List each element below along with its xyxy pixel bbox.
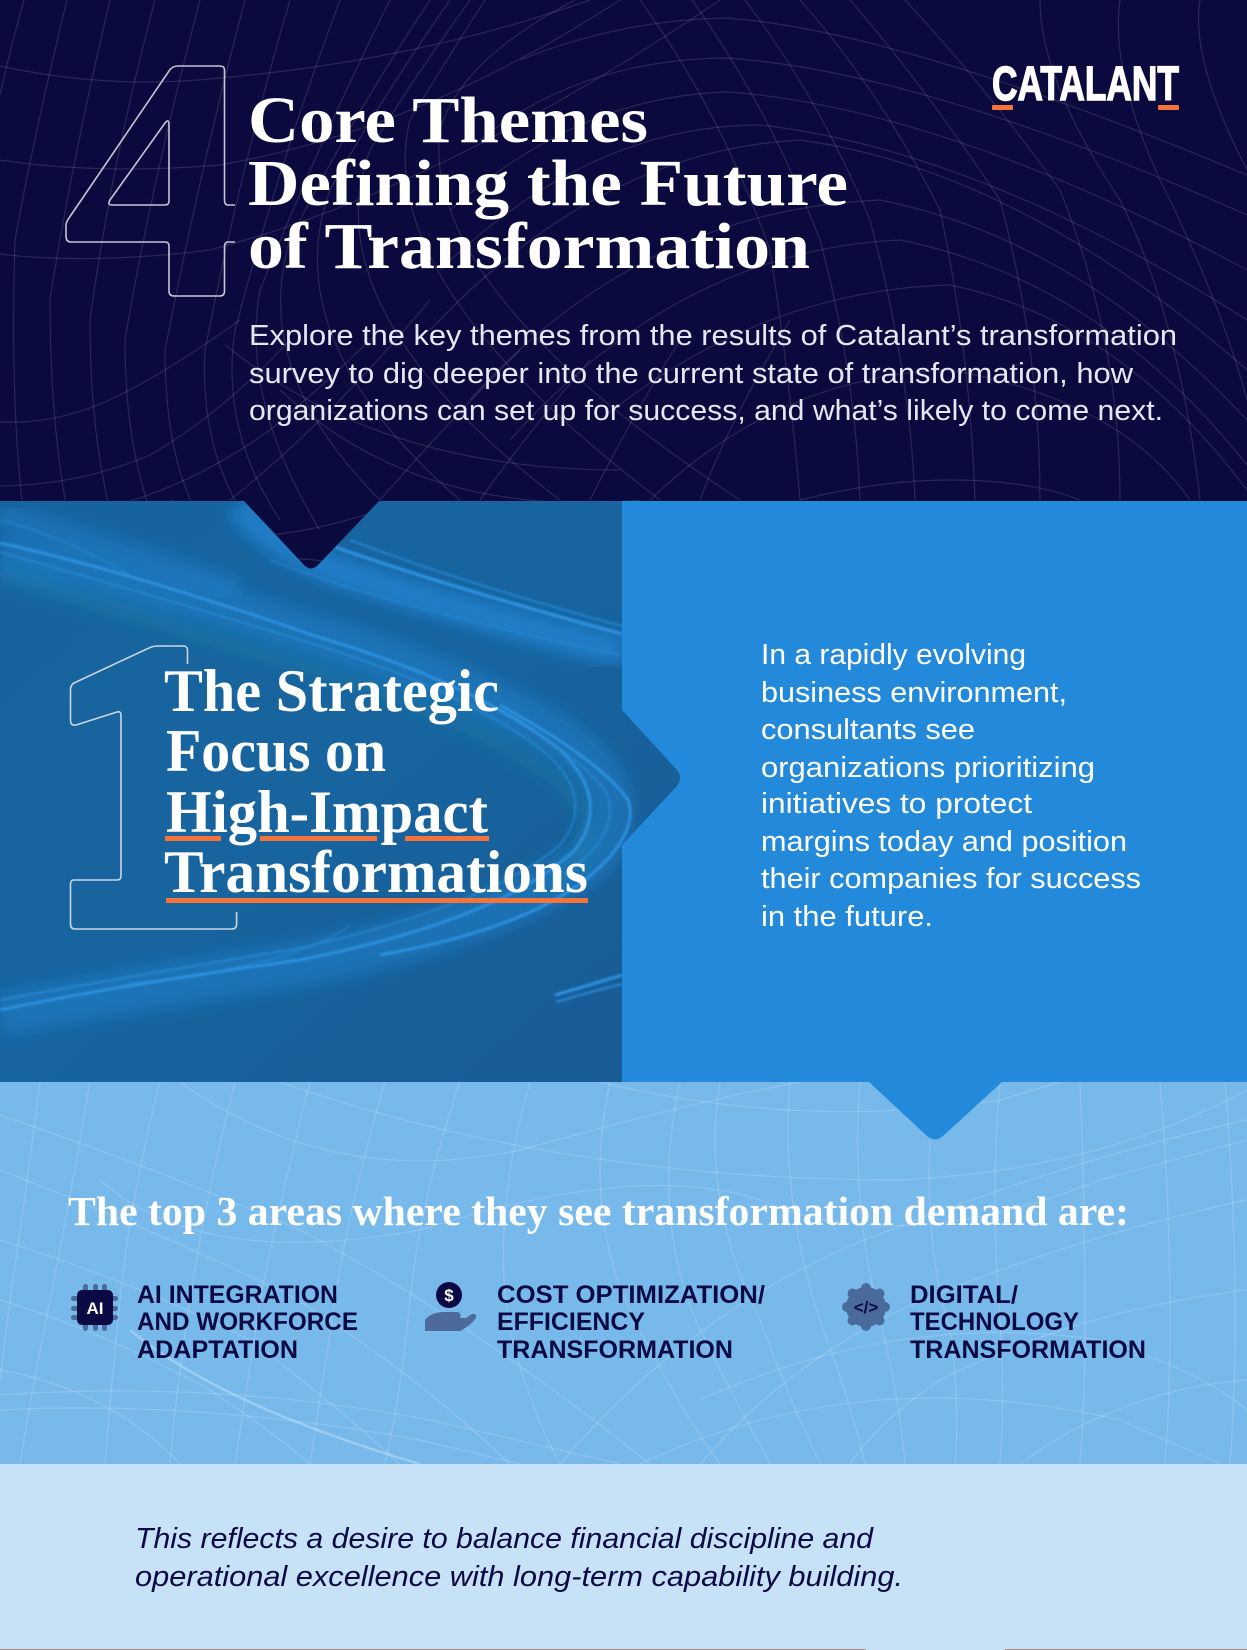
panel: right blue text panel [622, 501, 1247, 1082]
title [248, 84, 848, 283]
logo: Catalant: CATALANT [992, 58, 1179, 111]
text block: business environment: margins today and position [761, 826, 1127, 858]
panel: photo background with light streaks and right-pointing arrow [0, 501, 690, 1082]
text block: business environment: business environment, [761, 677, 1067, 709]
title: Defining the Future [248, 147, 848, 220]
label: AI integration [137, 1281, 358, 1364]
icon: AI chip: AI [86, 1299, 104, 1318]
intro paragraph: Explore the key themes from the results of Catalant’s transformation [249, 320, 1177, 352]
label: AI integration: ADAPTATION [137, 1336, 298, 1364]
text block: business environment: organizations prioritizing [761, 752, 1095, 784]
icon: outlined numeral 4 [66, 66, 235, 296]
text block: business environment: in the future. [761, 901, 933, 933]
text block: takeaway: This reflects a desire to balance financial discipline and [135, 1523, 874, 1555]
section heading: strategic focus [164, 658, 588, 905]
panel: bottom takeaway background [0, 1464, 1247, 1650]
section heading: strategic focus: Transformations [164, 839, 588, 905]
text block: takeaway [135, 1523, 903, 1593]
intro paragraph: survey to dig deeper into the current state of transformation, how [249, 358, 1133, 390]
label: digital technology: TRANSFORMATION [910, 1336, 1146, 1364]
intro paragraph [249, 320, 1177, 427]
label: digital technology: TECHNOLOGY [910, 1308, 1079, 1336]
label: AI integration: AI INTEGRATION [137, 1281, 338, 1309]
text block: business environment [761, 639, 1141, 933]
icon: hand holding dollar [425, 1282, 476, 1331]
panel: header background with notch [0, 0, 1247, 575]
label: cost optimization: TRANSFORMATION [497, 1336, 733, 1364]
section heading: strategic focus: Focus on [166, 718, 386, 784]
title: Core Themes [248, 84, 648, 157]
icon: outlined numeral 1 [70, 646, 237, 929]
text block: business environment: initiatives to protect [761, 788, 1032, 820]
icon: code gear [842, 1283, 890, 1331]
panel: light grid section background [0, 1082, 1247, 1464]
arrow: blue panel pointing down [869, 1082, 1002, 1140]
icon: hand holding dollar: $ [444, 1286, 454, 1305]
text block: business environment: their companies for success [761, 863, 1141, 895]
label: digital technology [910, 1281, 1146, 1364]
section heading: strategic focus: The Strategic [164, 658, 499, 724]
label: cost optimization: EFFICIENCY [497, 1308, 645, 1336]
intro paragraph: organizations can set up for success, and what’s likely to come next. [249, 395, 1163, 427]
text block: business environment: consultants see [761, 714, 975, 746]
label: cost optimization [497, 1281, 765, 1364]
text block: business environment: In a rapidly evolving [761, 639, 1026, 671]
icon: AI chip [71, 1284, 118, 1331]
section heading: strategic focus: High-Impact [166, 779, 488, 845]
heading: top 3 areas: The top 3 areas where they see transformation demand are: [68, 1188, 1129, 1234]
label: AI integration: AND WORKFORCE [137, 1308, 358, 1336]
label: digital technology: DIGITAL/ [910, 1281, 1018, 1309]
label: cost optimization: COST OPTIMIZATION/ [497, 1281, 765, 1309]
text block: takeaway: operational excellence with long-term capability building. [135, 1561, 903, 1593]
title: of Transformation [248, 210, 810, 283]
icon: code gear: </> [854, 1298, 878, 1317]
